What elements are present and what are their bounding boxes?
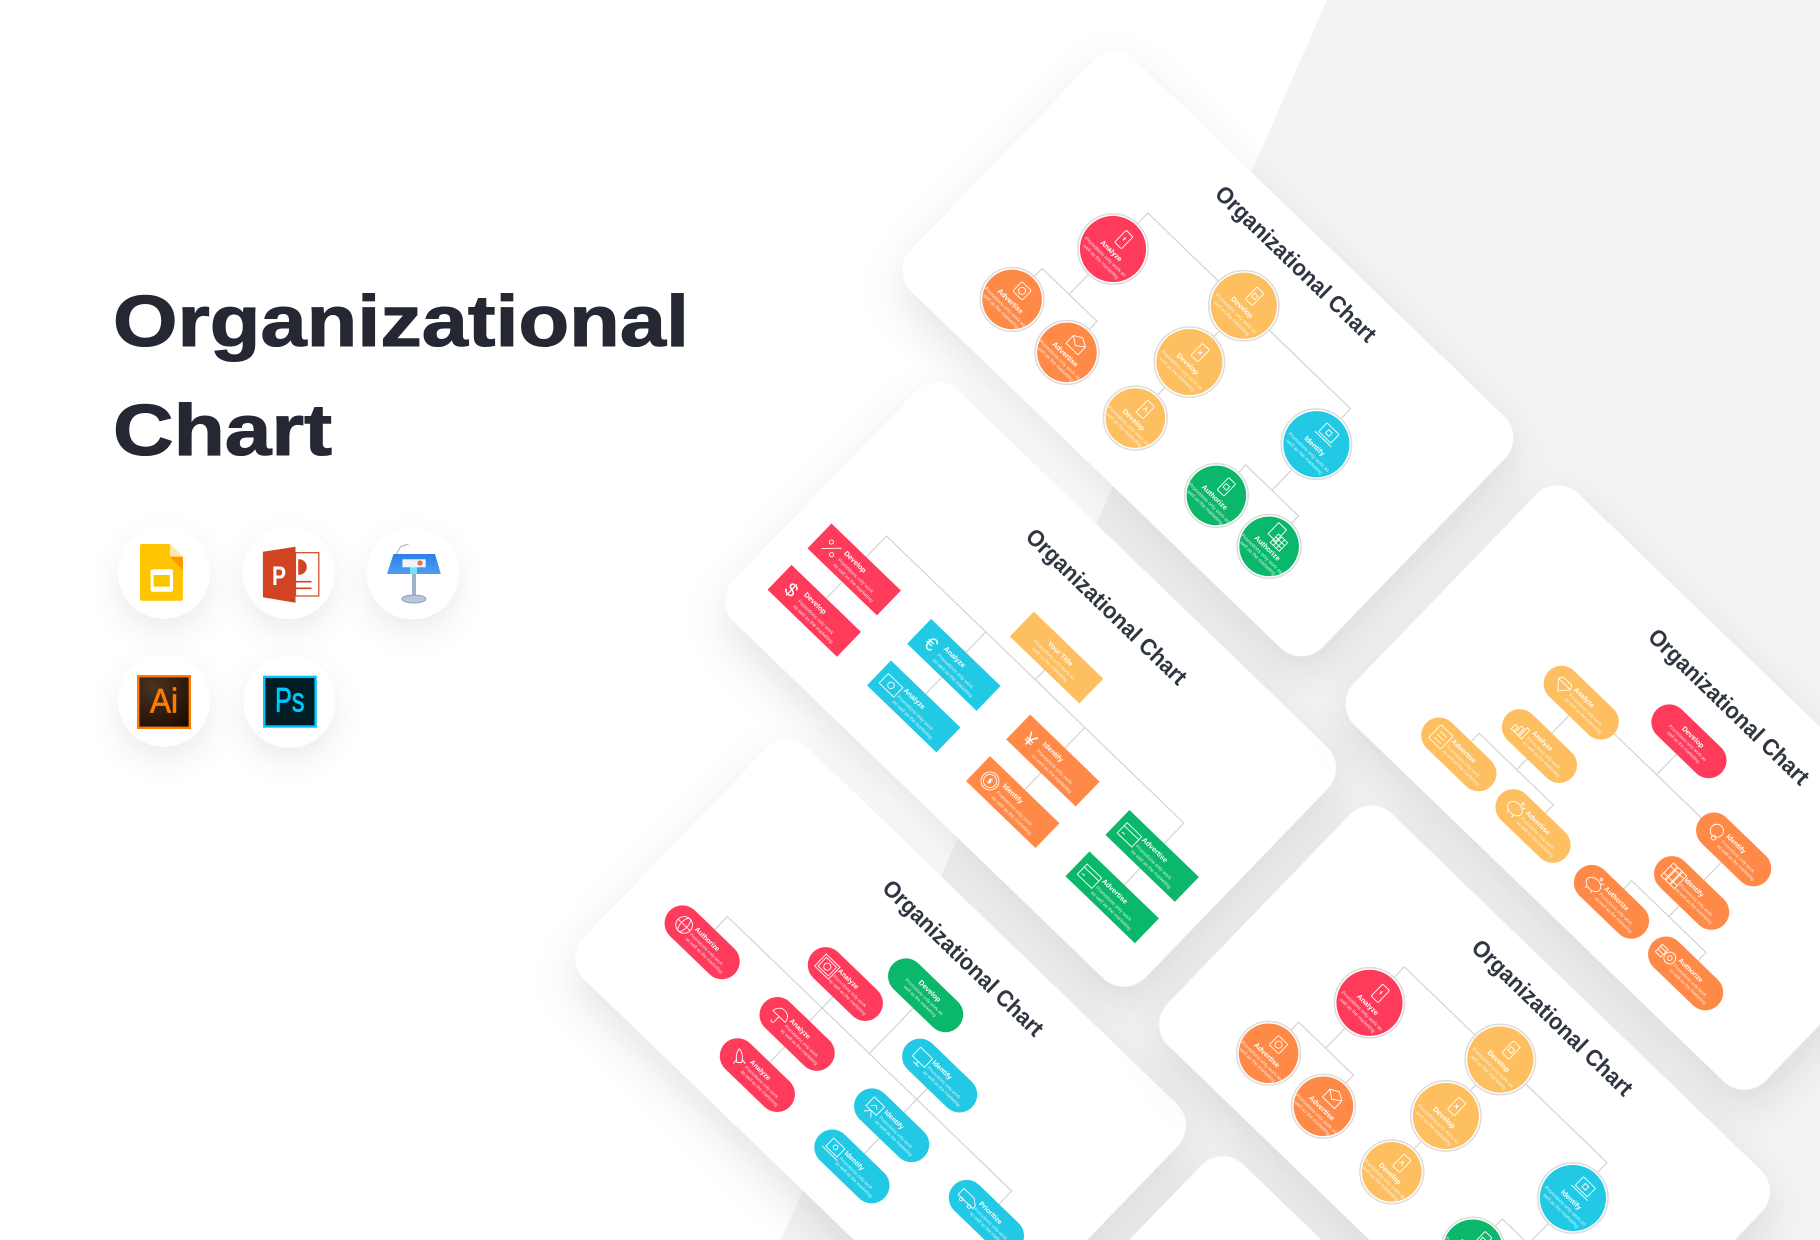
node: Analyze rocket: [712, 1031, 802, 1119]
slide title: Organizational Chart: [1467, 934, 1638, 1101]
node: Authorize: well as the marketing: [1238, 540, 1277, 577]
node: Analyze umbrella: Analyze: [788, 1018, 812, 1041]
connector lines: [663, 858, 1068, 1240]
node: Develop: Develop: [917, 979, 943, 1004]
node: Identify: Identify: [1303, 434, 1326, 458]
node: Analyze diamond: Analyze: [1572, 687, 1596, 710]
node: Authorize: [1171, 450, 1261, 541]
node: Your Title: well as the marketing: [1030, 646, 1069, 684]
node: Analyze euro: Promotions only work: [936, 653, 975, 691]
node: Identify books: Promotions only work: [1678, 883, 1714, 918]
node: Analyze: [1320, 953, 1419, 1053]
icon: Photoshop: [243, 656, 335, 748]
icon: PowerPoint: [243, 527, 335, 619]
node: Analyze: well as the marketing: [1338, 997, 1376, 1035]
node: Develop: well as the marketing: [903, 984, 938, 1018]
node: Advertise card: Advertise: [1100, 877, 1129, 906]
node: Identify: Promotions only work as: [1287, 431, 1331, 474]
node: Advertise: Advertise: [1051, 340, 1080, 369]
node: Analyze: Analyze: [1099, 239, 1124, 263]
node: Analyze: well as the marketing: [1081, 243, 1120, 281]
icon: Illustrator: Ai: [150, 683, 178, 721]
node: Analyze banknote: as well as the marketing: [891, 699, 934, 741]
node: Advertise: Advertise: [1252, 1041, 1281, 1069]
node: Analyze diamond: as well as the marketing: [1564, 697, 1603, 735]
node: Analyze banknote: Promotions only work: [896, 694, 934, 732]
slide card: blank, cropped at bottom: [998, 1144, 1634, 1240]
node: Identify coin: Promotions only work: [995, 790, 1033, 828]
node: Develop: [1194, 256, 1294, 355]
node: Analyze euro: [907, 619, 1001, 711]
node: Advertise: Promotions only work as: [1294, 1093, 1338, 1136]
node: Identify yen: Identify: [1041, 741, 1065, 764]
node: Your Title: Your Title: [1046, 640, 1074, 668]
icon: Google Slides: [118, 527, 210, 619]
node: Develop: Promotions only work as: [1470, 1047, 1515, 1089]
node: Identify headset: [1689, 805, 1779, 894]
node: Analyze banknote: Analyze: [902, 687, 927, 711]
node: Advertise: [967, 254, 1057, 345]
node: Prioritize: [941, 1172, 1031, 1240]
node: Analyze euro: Analyze: [942, 645, 967, 669]
node: Develop dollar: as well as the marketing: [791, 604, 834, 645]
node: Identify: well as the marketing: [1285, 439, 1323, 476]
node: Authorize coins: as well as the marketing: [1668, 967, 1708, 1006]
connector lines: [814, 514, 1205, 898]
node: Identify board: as well as the marketing: [874, 1119, 914, 1158]
node: Prioritize: Prioritize: [977, 1201, 1003, 1226]
node: Advertise: well as the marketing: [1293, 1100, 1331, 1137]
node: Authorize: [1224, 501, 1314, 591]
node: Authorize: Authorize: [1200, 483, 1229, 512]
slide card: rectangle org chart, middle: [713, 370, 1348, 999]
connector lines: [1269, 941, 1634, 1240]
node: Develop: [1396, 1066, 1496, 1166]
node: Develop dollar: [768, 565, 861, 657]
node: Analyze safe: as well as the marketing: [828, 978, 867, 1016]
node: Develop: [1644, 697, 1734, 786]
node: Develop: Develop: [1121, 408, 1147, 433]
node: Develop: Develop: [1377, 1161, 1403, 1187]
node: Develop: well as the marketing: [1158, 356, 1196, 394]
node: Your Title: Promotions only work as: [1032, 639, 1076, 682]
node: Develop: Promotions only work as: [1416, 1103, 1460, 1146]
node: Advertise card: Promotions only work: [1134, 844, 1173, 882]
node: Identify: Promotions only work as: [1543, 1185, 1587, 1228]
node: Develop: Develop: [1680, 725, 1706, 750]
background panel: grey diagonal: [781, 0, 1820, 1240]
node: Advertise card: as well as the marketing: [1129, 849, 1172, 891]
node: Analyze: Promotions only work as: [1340, 990, 1384, 1033]
node: Develop: Promotions only work as: [1214, 293, 1258, 336]
node: Advertise piggy: [1488, 782, 1578, 870]
node: Analyze bars: [1494, 702, 1584, 790]
node: Develop dollar: $: [780, 579, 802, 602]
node: Identify laptop: as well as the marketing: [834, 1160, 874, 1199]
node: Authorize: Authorize: [693, 926, 721, 953]
node: Identify headset: Identify: [1724, 833, 1747, 855]
node: Identify books: as well as the marketing: [1674, 887, 1713, 925]
node: Authorize piggy: Authorize: [1602, 886, 1630, 913]
node: Analyze diamond: [1536, 658, 1626, 747]
node: Develop: [1451, 1010, 1550, 1109]
node: Advertise: [1022, 307, 1112, 398]
node: Identify laptop: [807, 1122, 897, 1211]
main heading: Organizational: [113, 282, 689, 362]
node: Identify yen: Promotions only work: [1035, 748, 1074, 786]
icon: PowerPoint: P: [272, 561, 286, 591]
node: Advertise piggy: Promotions only work: [1520, 816, 1555, 851]
node: Analyze safe: [800, 940, 890, 1028]
node: Identify monitor: Identify: [930, 1059, 953, 1081]
slide card: circle org chart, bottom right: [1147, 793, 1782, 1240]
node: Develop: Promotions only work as: [904, 977, 945, 1017]
node: Authorize coins: Authorize: [1676, 957, 1704, 984]
node: Develop: Promotions only work as: [1668, 723, 1708, 763]
node: Identify monitor: as well as the marketing: [922, 1070, 962, 1108]
node: Authorize: Promotions only work as: [1187, 482, 1231, 525]
node: Identify headset: as well as the marketing: [1716, 844, 1756, 882]
node: Develop percent: as well as the marketing: [831, 562, 874, 604]
node: Authorize coins: Promotions only work: [1672, 963, 1708, 998]
icon: Photoshop: Ps: [275, 682, 304, 720]
node: Advertise: [1224, 1008, 1314, 1098]
node: Analyze: Promotions only work as: [1083, 236, 1127, 279]
node: Authorize: Promotions only work: [689, 932, 724, 967]
node: Analyze rocket: as well as the marketing: [740, 1069, 779, 1108]
node: Authorize: Promotions only work as: [1240, 533, 1284, 576]
node: Advertise: well as the marketing: [981, 293, 1020, 330]
node: Identify yen: ¥: [1018, 728, 1041, 752]
node: Analyze umbrella: [752, 990, 842, 1078]
node: Develop percent: Promotions only work: [836, 557, 875, 595]
node: Identify monitor: [895, 1031, 985, 1120]
node: Identify monitor: Promotions only work: [926, 1065, 962, 1100]
node: Identify laptop: Identify: [843, 1150, 865, 1172]
node: Advertise: Promotions only work as: [983, 286, 1027, 329]
node: Advertise: well as the marketing: [1036, 346, 1075, 383]
node: Analyze bars: as well as the marketing: [1522, 740, 1561, 778]
node: Develop: well as the marketing: [1414, 1110, 1453, 1148]
node: Identify: Identify: [1559, 1188, 1583, 1212]
node: Develop: Develop: [1175, 352, 1201, 377]
node: Develop: well as the marketing: [1666, 730, 1701, 764]
node: Analyze umbrella: as well as the marketing: [780, 1028, 819, 1066]
node: Develop: Promotions only work as: [1160, 349, 1204, 392]
node: Advertise: Promotions only work as: [1239, 1040, 1283, 1083]
node: Authorize piggy: Promotions only work: [1598, 892, 1634, 926]
node: Authorize: [657, 898, 747, 987]
node: Authorize: well as the marketing: [1186, 489, 1224, 526]
node: Develop: [1347, 1127, 1437, 1217]
connector lines: [1012, 187, 1377, 547]
node: Develop percent: Develop: [842, 550, 868, 575]
node: Develop: Develop: [1486, 1049, 1512, 1074]
node: Develop: well as the marketing: [1469, 1054, 1507, 1091]
node: Analyze rocket: Promotions only work: [744, 1065, 780, 1100]
node: Develop: well as the marketing: [1212, 300, 1251, 337]
node: Analyze bars: Promotions only work: [1526, 736, 1562, 771]
node: Advertise card: Promotions only work: [1094, 885, 1133, 923]
node: Identify yen: as well as the marketing: [1030, 753, 1073, 795]
node: Advertise clipboard: [1414, 710, 1504, 799]
node: Analyze diamond: Promotions only work: [1568, 692, 1604, 727]
node: Identify books: [1647, 849, 1737, 937]
node: Identify coin: as well as the marketing: [990, 795, 1033, 837]
node: Identify coin: [966, 756, 1059, 848]
node: Analyze euro: €: [919, 633, 942, 656]
node: Develop: well as the marketing: [1104, 412, 1143, 449]
node: Analyze: Analyze: [1355, 993, 1380, 1017]
slide card: circle org chart, top: [890, 40, 1526, 668]
node: Develop: Develop: [1431, 1105, 1457, 1131]
slide card: pill org chart, right: [1333, 473, 1820, 1102]
node: Authorize piggy: as well as the marketing: [1594, 896, 1633, 934]
node: Advertise clipboard: as well as the marketing: [1441, 748, 1481, 787]
connector lines: [1459, 633, 1803, 973]
node: Develop: [881, 951, 971, 1040]
node: Identify board: Promotions only work: [878, 1115, 914, 1150]
node: Analyze banknote: [867, 660, 960, 752]
main heading: Chart: [113, 391, 332, 471]
node: Authorize piggy: [1566, 857, 1656, 946]
node: Develop: Develop: [1229, 295, 1255, 321]
node: Identify: [1267, 394, 1366, 494]
node: Identify laptop: Promotions only work: [838, 1156, 874, 1191]
node: Develop: Promotions only work as: [1362, 1158, 1406, 1201]
node: Develop dollar: Develop: [802, 591, 828, 616]
node: Identify board: [847, 1081, 937, 1170]
slide card: pill org chart, lower left: [563, 727, 1198, 1240]
node: Analyze safe: Promotions only work: [832, 974, 868, 1009]
node: Advertise card: Advertise: [1140, 836, 1169, 864]
node: Advertise piggy: as well as the marketing: [1515, 820, 1555, 858]
slide title: Organizational Chart: [878, 875, 1049, 1042]
node: Prioritize: Promotions only work: [973, 1207, 1009, 1240]
node: Advertise card: as well as the marketing: [1089, 890, 1132, 932]
node: Identify: well as the marketing: [1541, 1192, 1580, 1230]
node: Advertise: well as the marketing: [1238, 1047, 1276, 1084]
node: Develop: [1140, 312, 1239, 412]
node: Advertise card: [1105, 810, 1199, 902]
node: Develop percent: [807, 523, 901, 615]
node: Identify: [1523, 1148, 1623, 1240]
node: Analyze rocket: Analyze: [748, 1059, 772, 1082]
node: Identify books: Identify: [1682, 877, 1705, 899]
node: Identify headset: Promotions only work: [1720, 839, 1756, 874]
node: Develop: [1090, 373, 1180, 463]
node: Advertise card: [1065, 851, 1159, 943]
node: Analyze safe: Analyze: [836, 968, 860, 991]
node: Advertise: Promotions only work as: [1038, 339, 1082, 382]
node: Identify yen: [1006, 715, 1100, 806]
node: Advertise clipboard: Promotions only work: [1445, 744, 1481, 779]
node: Authorize: [1428, 1204, 1518, 1240]
icon: Keynote: [367, 527, 459, 619]
node: Analyze umbrella: Promotions only work: [784, 1024, 819, 1059]
node: Analyze euro: as well as the marketing: [931, 658, 974, 699]
node: Identify board: Identify: [882, 1109, 905, 1131]
node: Authorize: Authorize: [1253, 534, 1282, 563]
node: Authorize coins: [1641, 929, 1731, 1018]
node: Advertise: Advertise: [1307, 1094, 1336, 1122]
slide title: Organizational Chart: [1210, 180, 1382, 347]
node: Develop: Promotions only work as: [1106, 405, 1150, 447]
node: Advertise: [1278, 1061, 1369, 1151]
node: Analyze bars: Analyze: [1530, 730, 1554, 753]
node: Develop dollar: Promotions only work: [796, 599, 835, 637]
main heading: [113, 282, 689, 471]
slide title: Organizational Chart: [1021, 523, 1193, 690]
node: Identify coin: Identify: [1001, 782, 1025, 806]
node: Advertise piggy: Advertise: [1524, 810, 1551, 837]
node: Develop: well as the marketing: [1361, 1165, 1399, 1203]
node: Advertise clipboard: Advertise: [1450, 738, 1477, 765]
node: Authorize: as well as the marketing: [685, 936, 724, 975]
node: Advertise: Advertise: [996, 287, 1025, 316]
node: Your Title: [1010, 612, 1103, 704]
icon: Illustrator: [118, 655, 210, 747]
node: Analyze: [1063, 199, 1163, 299]
